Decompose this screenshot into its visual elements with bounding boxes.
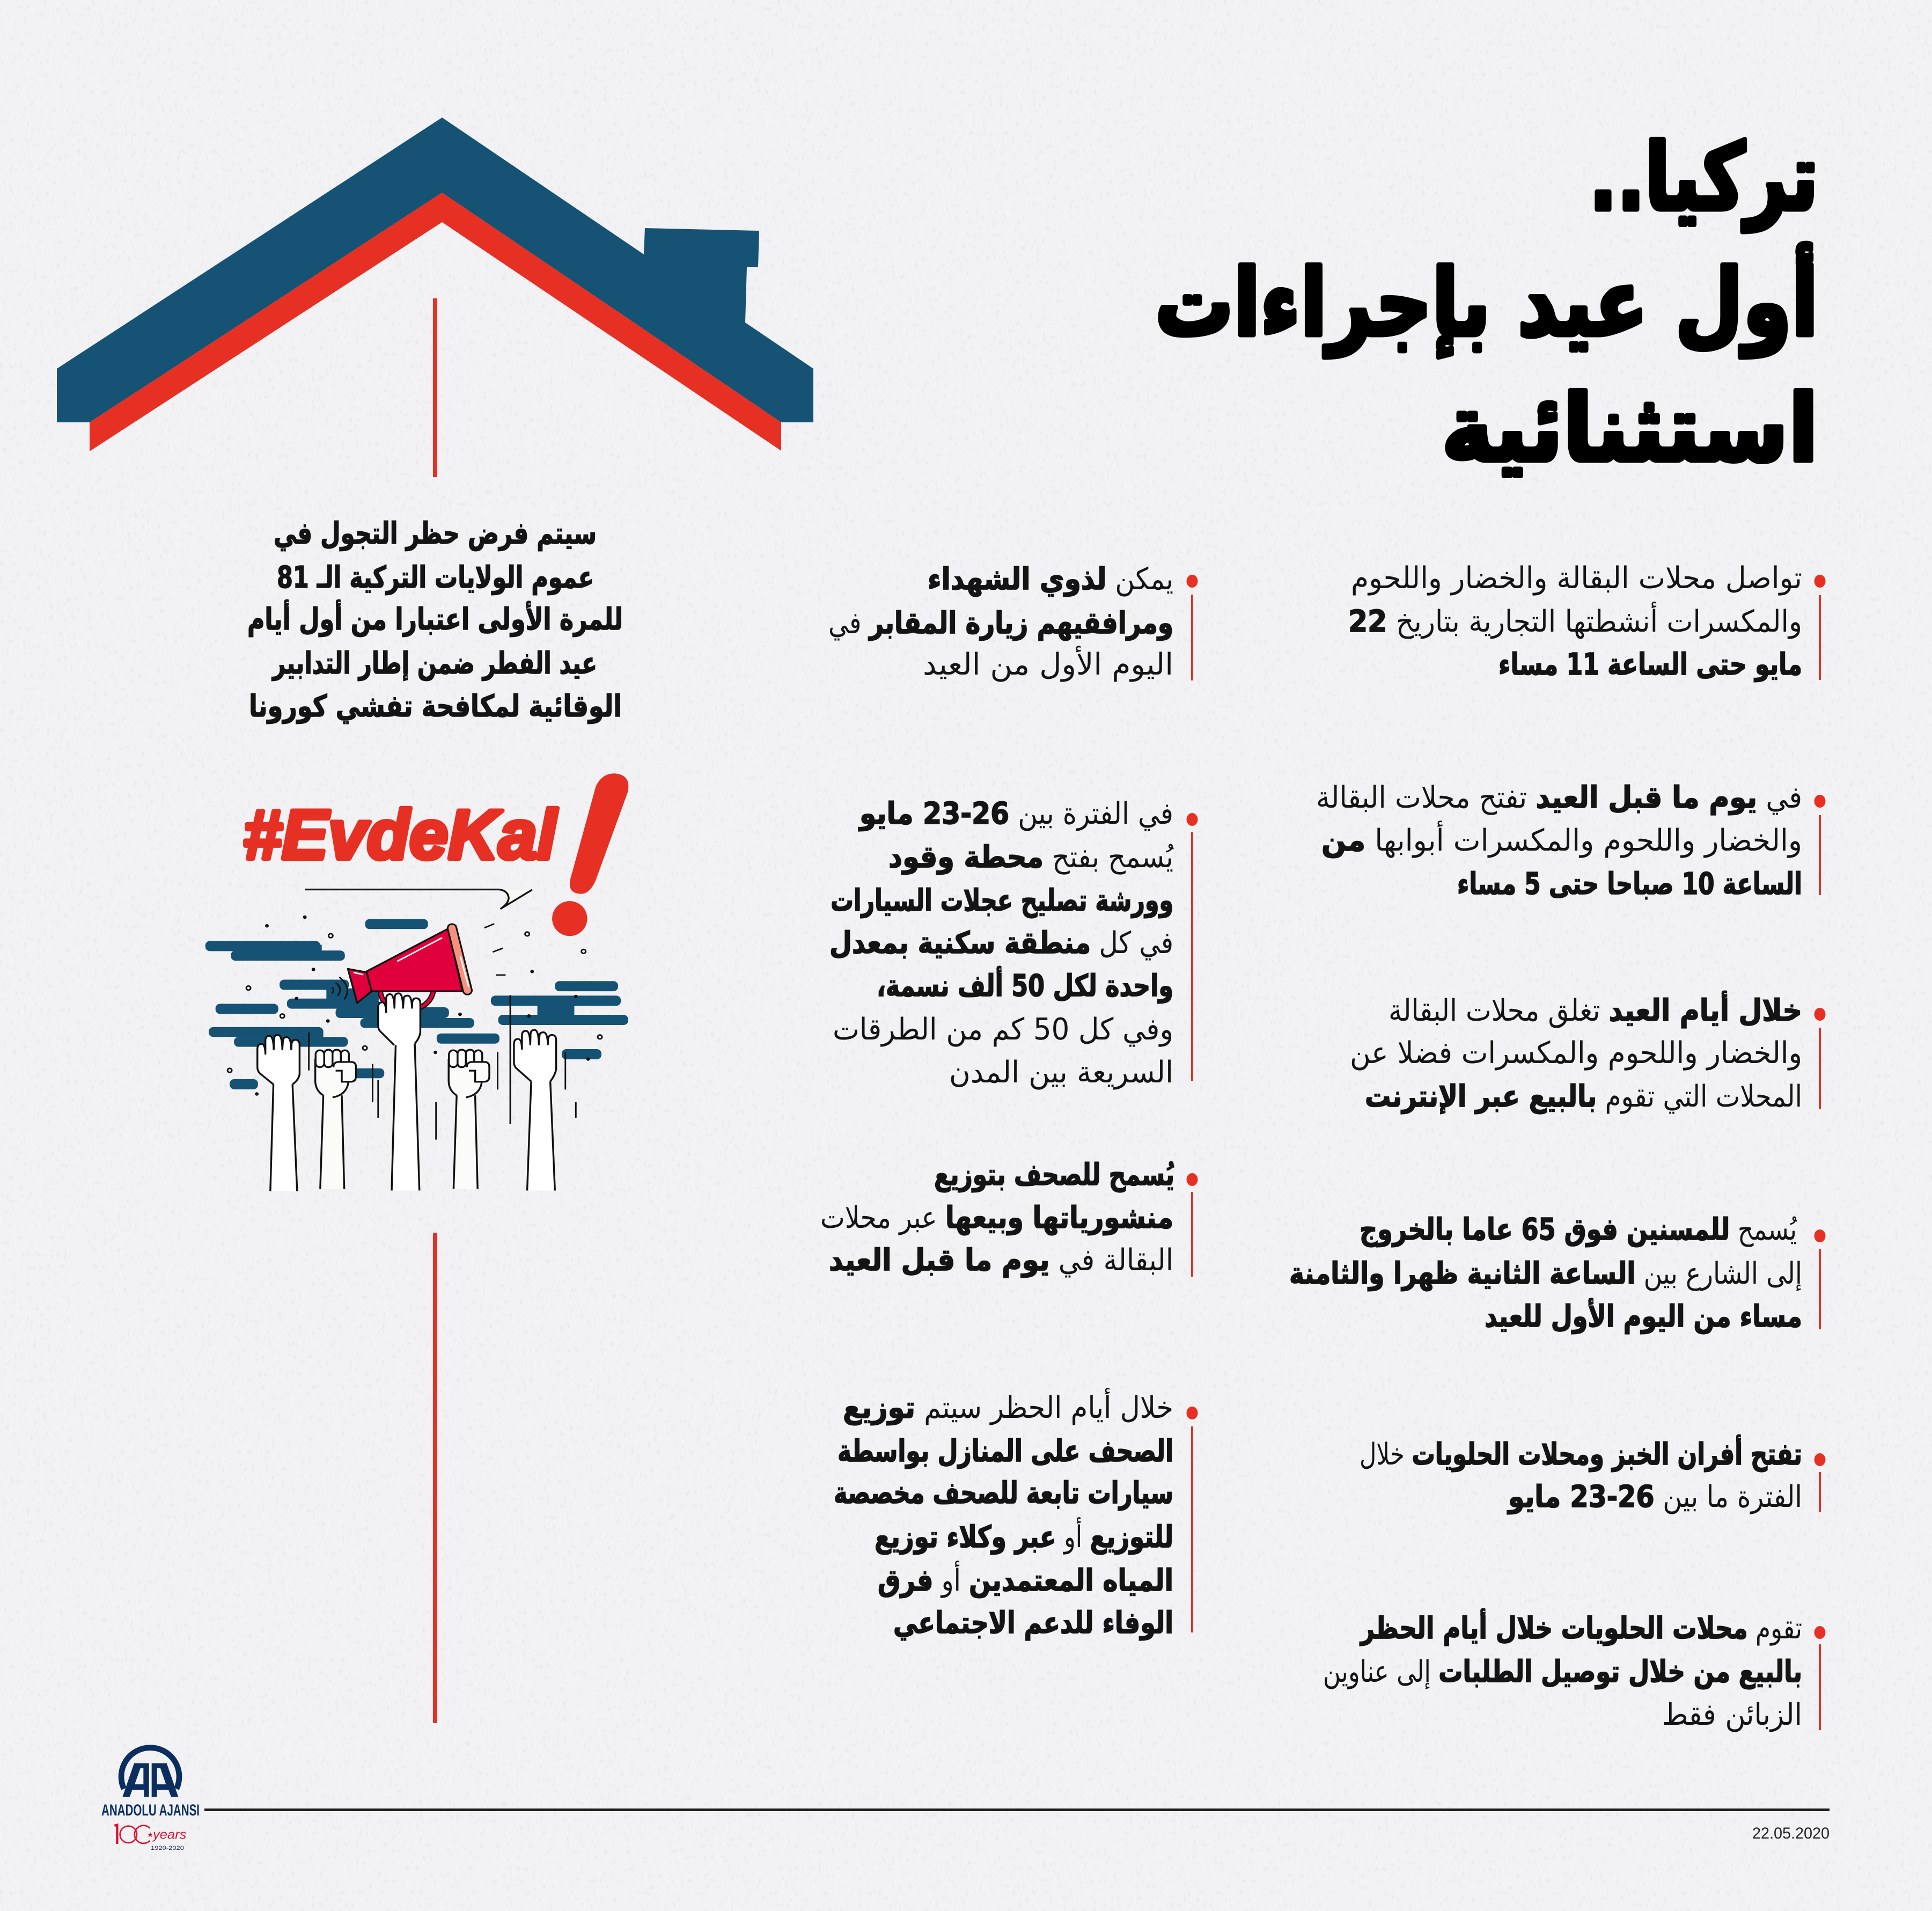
panel: column one, item 1 bbox=[1348, 561, 1825, 682]
logo: 100 years anniversary bbox=[114, 1825, 186, 1851]
text: مساء من اليوم الأول للعيد bbox=[1485, 1298, 1802, 1334]
bullet and rule bbox=[1815, 1453, 1825, 1512]
panel: column two, item 1 bbox=[828, 562, 1198, 682]
title bbox=[1155, 123, 1818, 482]
text: يمكن لذوي الشهداء bbox=[928, 562, 1173, 597]
title: استثنائية bbox=[1442, 375, 1818, 482]
text: يُسمح للصحف بتوزيع bbox=[934, 1158, 1174, 1192]
text: اليوم الأول من العيد bbox=[923, 646, 1173, 682]
text bbox=[829, 796, 1174, 1090]
text bbox=[1316, 780, 1802, 902]
hashtag: EvdeKal: #EvdeKal bbox=[243, 795, 558, 874]
text: خلال أيام الحظر سيتم توزيع bbox=[843, 1388, 1173, 1425]
text bbox=[1348, 561, 1802, 682]
intro text block: عموم الولايات التركية الـ 81 bbox=[277, 560, 594, 595]
intro text block: الوقائية لمكافحة تفشي كورونا bbox=[249, 689, 622, 724]
text: البقالة في يوم ما قبل العيد bbox=[829, 1243, 1173, 1278]
text: خلال أيام العيد تغلق محلات البقالة bbox=[1389, 991, 1802, 1028]
intro text block: سيتم فرض حظر التجول في bbox=[274, 516, 597, 551]
text: المحلات التي تقوم بالبيع عبر الإنترنت bbox=[1365, 1079, 1802, 1114]
intro text block: للمرة الأولى اعتبارا من أول أيام bbox=[247, 599, 623, 637]
logo mark: AA arch bbox=[121, 1748, 179, 1797]
icon: fist left bbox=[315, 1050, 356, 1189]
icon: hand far right bbox=[514, 1030, 556, 1190]
text bbox=[1360, 1434, 1802, 1514]
text: ومرافقيهم زيارة المقابر في bbox=[828, 606, 1173, 641]
text: بالبيع من خلال توصيل الطلبات إلى عناوين bbox=[1323, 1654, 1802, 1689]
speech line bbox=[305, 889, 532, 909]
title: تركيا.. bbox=[1589, 123, 1818, 232]
divider: lower vertical red rule bbox=[433, 1233, 437, 1723]
panel: column one, item 2 bbox=[1316, 780, 1825, 902]
icon: house roof bbox=[57, 118, 813, 451]
text: منشورياتها وبيعها عبر محلات bbox=[820, 1200, 1173, 1235]
icon: hand centre holding megaphone bbox=[378, 993, 420, 1190]
text bbox=[1323, 1608, 1802, 1732]
bullet and rule bbox=[1815, 1008, 1825, 1109]
bullet and rule bbox=[1815, 1626, 1825, 1730]
text: في كل منطقة سكنية بمعدل bbox=[829, 926, 1173, 961]
icon: hand far left bbox=[258, 1035, 299, 1191]
text: يُسمح للمسنين فوق 65 عاما بالخروج bbox=[1360, 1212, 1797, 1247]
bullet and rule bbox=[1187, 575, 1198, 680]
text: المياه المعتمدين أو فرق bbox=[878, 1561, 1173, 1598]
panel: column one, item 3 bbox=[1350, 991, 1825, 1114]
text: الفترة ما بين 26-23 مايو bbox=[1507, 1480, 1802, 1514]
bullet and rule bbox=[1815, 795, 1825, 895]
text: وفي كل 50 كم من الطرقات bbox=[833, 1012, 1173, 1047]
logo: Anadolu Ajansi bbox=[101, 1748, 200, 1851]
panel: column one, item 6 bbox=[1323, 1608, 1825, 1732]
bullet and rule bbox=[1187, 813, 1198, 1081]
logo: 100 years anniversary: years bbox=[152, 1828, 186, 1842]
text: إلى الشارع بين الساعة الثانية ظهرا والثامنة bbox=[1289, 1256, 1802, 1291]
text: الزبائن فقط bbox=[1662, 1697, 1802, 1732]
panel: column one, item 5 bbox=[1360, 1434, 1825, 1514]
text: السريعة بين المدن bbox=[949, 1055, 1173, 1090]
text: في الفترة بين 26-23 مايو bbox=[858, 796, 1173, 831]
icon: exclamation mark bbox=[552, 773, 628, 936]
text: الصحف على المنازل بواسطة bbox=[838, 1434, 1173, 1469]
text: الساعة 10 صباحا حتى 5 مساء bbox=[1457, 867, 1802, 902]
clouds bbox=[205, 919, 628, 1089]
icon: fist right bbox=[449, 1050, 489, 1189]
text: واحدة لكل 50 ألف نسمة، bbox=[877, 966, 1173, 1004]
icon: megaphone bbox=[332, 928, 469, 1011]
text: والخضار واللحوم والمكسرات أبوابها من bbox=[1321, 821, 1802, 858]
text: تفتح أفران الخبز ومحلات الحلويات خلال bbox=[1360, 1434, 1802, 1472]
text: مايو حتى الساعة 11 مساء bbox=[1498, 647, 1802, 682]
text: تقوم محلات الحلويات خلال أيام الحظر bbox=[1360, 1608, 1802, 1646]
text: والخضار واللحوم والمكسرات فضلا عن bbox=[1350, 1036, 1802, 1071]
text: في يوم ما قبل العيد تفتح محلات البقالة bbox=[1316, 780, 1802, 815]
panel: column two, item 3 bbox=[820, 1158, 1198, 1278]
intro text block bbox=[247, 516, 623, 724]
text: للتوزيع أو عبر وكلاء توزيع bbox=[875, 1517, 1173, 1555]
date: 22.05.2020 bbox=[1752, 1825, 1830, 1842]
logo wordmark: ANADOLU AJANSI bbox=[101, 1802, 200, 1819]
text: وورشة تصليح عجلات السيارات bbox=[831, 883, 1173, 918]
text: تواصل محلات البقالة والخضار واللحوم bbox=[1351, 561, 1802, 596]
text: سيارات تابعة للصحف مخصصة bbox=[834, 1476, 1173, 1511]
bullet and rule bbox=[1187, 1407, 1198, 1632]
footer rule bbox=[204, 1809, 1830, 1811]
title: أول عيد بإجراءات bbox=[1155, 243, 1818, 357]
text bbox=[1350, 991, 1802, 1114]
logo: 100 years anniversary: 1920-2020 bbox=[151, 1845, 184, 1851]
text: والمكسرات أنشطتها التجارية بتاريخ 22 bbox=[1348, 602, 1802, 639]
bullet and rule bbox=[1815, 1229, 1825, 1329]
text bbox=[1289, 1212, 1802, 1334]
text bbox=[834, 1388, 1173, 1641]
text: الوفاء للدعم الاجتماعي bbox=[893, 1606, 1173, 1641]
text bbox=[820, 1158, 1174, 1278]
panel: column one, item 4 bbox=[1289, 1212, 1825, 1334]
bullet and rule bbox=[1815, 575, 1825, 680]
divider: upper vertical red rule bbox=[433, 298, 437, 477]
bullet and rule bbox=[1187, 1173, 1198, 1277]
motion lines and dots bbox=[227, 916, 602, 1140]
text bbox=[828, 562, 1173, 682]
illustration: raised hands with megaphone bbox=[205, 773, 628, 1191]
panel: column two, item 4 bbox=[834, 1388, 1198, 1641]
intro text block: عيد الفطر ضمن إطار التدابير bbox=[271, 646, 597, 681]
text: يُسمح بفتح محطة وقود bbox=[888, 840, 1174, 875]
panel: column two, item 2 bbox=[829, 796, 1198, 1090]
